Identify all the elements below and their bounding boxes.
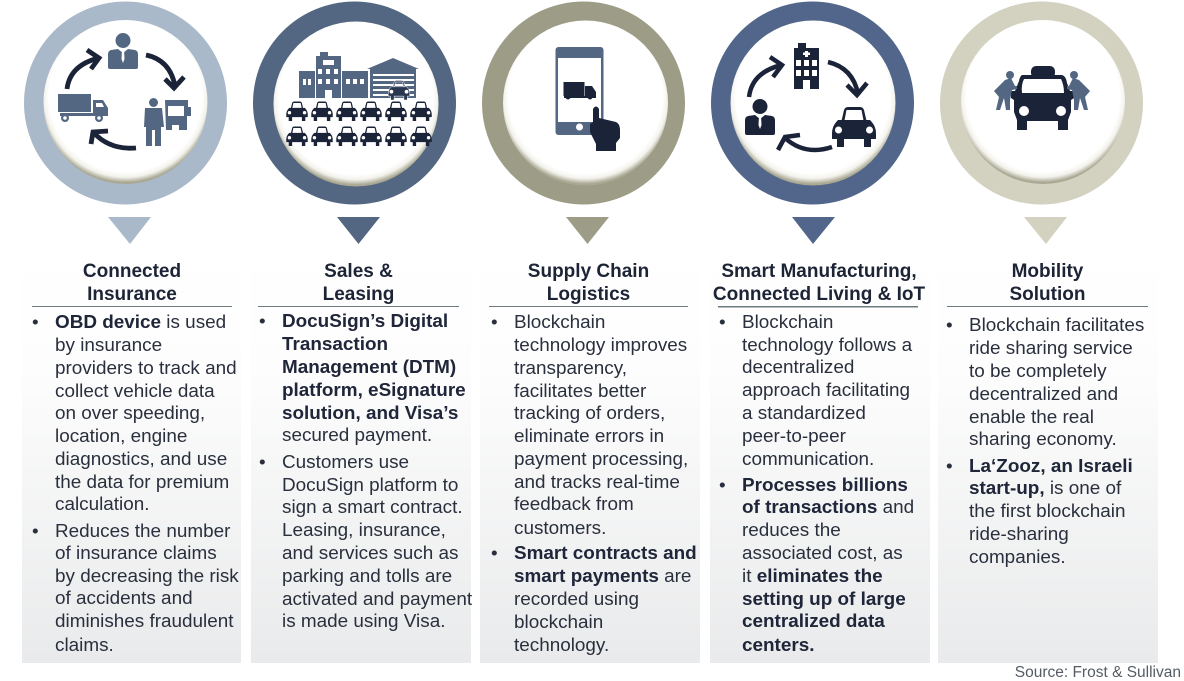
heading: sales and leasing: Sales & — [324, 261, 393, 282]
text block: connected insurance: providers to track and — [55, 358, 237, 379]
icon: businessman — [745, 99, 775, 135]
pointer triangle 4 — [792, 217, 835, 244]
text block: mobility solution: ride-sharing — [969, 524, 1069, 545]
icon: car — [832, 107, 876, 147]
text block: sales and leasing: and services such as — [282, 543, 458, 564]
text block: supply chain logistics: and tracks real-time — [514, 472, 680, 493]
icon: hospital — [794, 43, 819, 89]
text block: supply chain logistics: facilitates better — [514, 381, 646, 402]
icon: warehouse car — [388, 80, 410, 100]
icon: person with tie — [108, 33, 138, 69]
text block: smart manufacturing: technology follows a — [742, 335, 912, 356]
circle 3: supply chain — [482, 2, 685, 204]
heading: smart manufacturing connected living and iot: Connected Living & IoT — [713, 284, 925, 305]
text block: supply chain logistics: customers. — [514, 518, 606, 539]
text block: smart manufacturing: of transactions and — [742, 497, 914, 518]
pointer triangle 3 — [566, 217, 609, 244]
divider under smart manufacturing heading — [718, 306, 918, 308]
text block: connected insurance: diminishes fraudulent — [55, 611, 234, 632]
text block: connected insurance: of accidents and — [55, 588, 193, 609]
text block: smart manufacturing: peer-to-peer — [742, 426, 846, 447]
heading: supply chain logistics: Supply Chain — [528, 261, 649, 282]
icon: rows of cars — [286, 101, 432, 146]
text block: supply chain logistics: transparency, — [514, 358, 627, 379]
circle 5: mobility — [940, 2, 1143, 204]
text block: smart manufacturing: it eliminates the — [742, 566, 883, 587]
text block: supply chain logistics: payment processing, — [514, 449, 688, 470]
text block: sales and leasing: • — [259, 311, 266, 332]
text block: sales and leasing: Leasing, insurance, — [282, 520, 446, 541]
panel: smart manufacturing background — [710, 245, 930, 663]
text block: supply chain logistics: Smart contracts and — [514, 543, 697, 564]
text block: smart manufacturing: communication. — [742, 449, 874, 470]
text block: mobility solution: La‘Zooz, an Israeli — [969, 456, 1133, 477]
panel: supply chain background — [480, 245, 700, 663]
text block: connected insurance: claims. — [55, 635, 114, 656]
text block: sales and leasing: DocuSign platform to — [282, 475, 458, 496]
text block: connected insurance: • — [32, 521, 39, 542]
text block: smart manufacturing: centralized data — [742, 611, 885, 632]
text block: connected insurance: diagnostics, and use — [55, 449, 227, 470]
text block: smart manufacturing: setting up of large — [742, 589, 906, 610]
text block: mobility solution: • — [946, 456, 953, 477]
text block: sales and leasing: DocuSign’s Digital — [282, 311, 448, 332]
icon: cycle arrows — [67, 50, 184, 148]
text block: sales and leasing: secured payment. — [282, 425, 432, 446]
text block: supply chain logistics: • — [491, 312, 498, 333]
text block: mobility solution: start-up, is one of — [969, 478, 1121, 499]
text block: supply chain logistics: eliminate errors in — [514, 426, 664, 447]
text block: sales and leasing: is made using Visa. — [282, 611, 445, 632]
text block: sales and leasing: • — [259, 452, 266, 473]
heading: mobility solution: Mobility — [1012, 261, 1083, 282]
pointer triangle 2 — [337, 217, 380, 244]
panel: mobility background — [938, 245, 1158, 663]
pointer triangle 1 — [108, 217, 151, 244]
text block: mobility solution: to be completely — [969, 361, 1107, 382]
heading: mobility solution — [947, 260, 1148, 307]
text block: connected insurance: of insurance claims — [55, 543, 217, 564]
text block: mobility solution: decentralized and — [969, 384, 1118, 405]
text block: connected insurance: collect vehicle data — [55, 381, 215, 402]
heading: connected insurance — [32, 260, 232, 307]
icon: pointing hand — [590, 106, 620, 151]
text block: supply chain logistics: tracking of orders, — [514, 403, 665, 424]
heading: smart manufacturing connected living and iot — [713, 261, 925, 305]
panel: sales and leasing background — [251, 245, 471, 663]
text block: sales and leasing: Customers use — [282, 452, 409, 473]
text block: connected insurance: Reduces the number — [55, 521, 230, 542]
heading: smart manufacturing connected living and iot: Smart Manufacturing, — [721, 261, 917, 282]
text block: smart manufacturing: Blockchain — [742, 312, 833, 333]
text block: supply chain logistics: • — [491, 543, 498, 564]
panel: connected insurance background — [22, 245, 241, 663]
text block: connected insurance: location, engine — [55, 426, 187, 447]
icon: driver and truck — [144, 98, 191, 146]
text block: supply chain logistics: smart payments are — [514, 566, 691, 587]
text block: supply chain logistics: recorded using — [514, 589, 639, 610]
text block: supply chain logistics: feedback from — [514, 494, 634, 515]
circle 1: connected insurance — [24, 2, 227, 204]
heading: connected insurance: Connected — [83, 261, 181, 282]
text block: mobility solution: ride sharing service — [969, 338, 1133, 359]
text block: connected insurance: • — [32, 312, 39, 333]
text block: supply chain logistics: Blockchain — [514, 312, 605, 333]
heading: sales and leasing — [258, 260, 459, 307]
text block: sales and leasing: platform, eSignature — [282, 380, 466, 401]
text block: sales and leasing: parking and tolls are — [282, 566, 452, 587]
text block: smart manufacturing: associated cost, as — [742, 543, 903, 564]
text block: sales and leasing: Transaction — [282, 334, 388, 355]
text block: sales and leasing: Management (DTM) — [282, 357, 456, 378]
heading: mobility solution: Solution — [1010, 284, 1085, 305]
text block: smart manufacturing: • — [719, 475, 726, 496]
circle 2: sales and leasing — [253, 2, 456, 204]
heading: connected insurance: Insurance — [87, 284, 177, 305]
text block: sales and leasing: sign a smart contract. — [282, 497, 463, 518]
text block: sales and leasing: activated and payment — [282, 589, 472, 610]
icon: taxi — [1011, 66, 1074, 130]
text block: supply chain logistics: blockchain — [514, 612, 603, 633]
text block: connected insurance: by insurance — [55, 335, 162, 356]
source credit: Source: Frost & Sullivan — [1015, 664, 1181, 681]
icon: smartphone with truck — [556, 47, 604, 135]
text block: smart manufacturing: reduces the — [742, 520, 841, 541]
text block: smart manufacturing: approach facilitating — [742, 380, 910, 401]
pointer triangle 5 — [1024, 217, 1067, 244]
text block: mobility solution: the first blockchain — [969, 501, 1125, 522]
text block: supply chain logistics: technology improves — [514, 335, 687, 356]
icon: cycle arrows — [749, 57, 867, 150]
text block: sales and leasing: solution, and Visa’s — [282, 403, 458, 424]
text block: connected insurance: by decreasing the risk — [55, 566, 239, 587]
text block: connected insurance: the data for premium — [55, 472, 229, 493]
icon: factory and warehouse — [299, 52, 419, 98]
text block: smart manufacturing: • — [719, 312, 726, 333]
circle 4: smart manufacturing — [711, 2, 914, 204]
text block: mobility solution: • — [946, 315, 953, 336]
text block: smart manufacturing: Processes billions — [742, 475, 908, 496]
text block: connected insurance: calculation. — [55, 494, 150, 515]
text block: supply chain logistics: technology. — [514, 635, 609, 656]
heading: supply chain logistics: Logistics — [547, 284, 630, 305]
icon: delivery truck — [58, 94, 108, 122]
text block: mobility solution: companies. — [969, 547, 1066, 568]
text block: smart manufacturing: centers. — [742, 635, 814, 656]
text block: mobility solution: sharing economy. — [969, 429, 1117, 450]
text block: mobility solution: Blockchain facilitates — [969, 315, 1144, 336]
text block: connected insurance: OBD device is used — [55, 312, 226, 333]
text block: mobility solution: enable the real — [969, 407, 1094, 428]
text block: smart manufacturing: decentralized — [742, 357, 854, 378]
heading: supply chain logistics — [489, 260, 688, 307]
text block: connected insurance: on over speeding, — [55, 403, 205, 424]
icon: pushing people — [994, 71, 1090, 110]
text block: smart manufacturing: a standardized — [742, 403, 866, 424]
heading: sales and leasing: Leasing — [323, 284, 394, 305]
